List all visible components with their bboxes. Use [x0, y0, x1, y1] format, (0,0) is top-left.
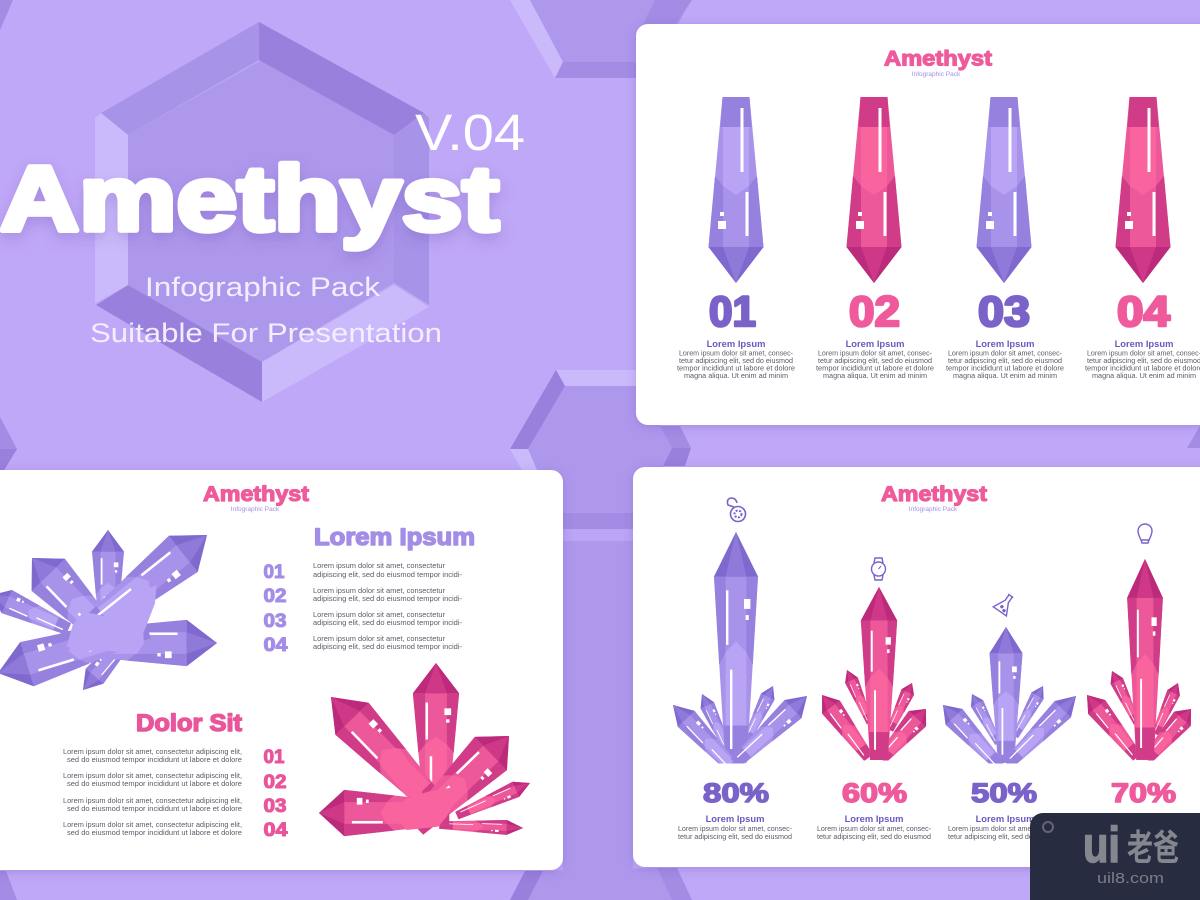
list numbers: pink — [264, 746, 288, 841]
list text: purple: adipiscing elit, sed do eiusmod tempor incidi- — [313, 594, 463, 603]
list numbers: purple: 03 — [264, 610, 287, 632]
panel heading: Infographic Pack — [909, 506, 958, 513]
panel heading: Amethyst — [884, 48, 992, 70]
list numbers: pink: 02 — [264, 771, 287, 793]
watermark badge: uil8.com — [1097, 870, 1164, 887]
icon: padlock — [727, 498, 746, 522]
step numbers: 02 — [849, 288, 900, 336]
crystal chart: 70% — [1087, 559, 1191, 760]
step 01 text: magna aliqua. Ut enim ad minim — [684, 371, 788, 380]
subtitle: Suitable For Presentation — [90, 318, 442, 348]
list numbers: purple: 02 — [264, 585, 287, 607]
list text: pink: sed do eiusmod tempor incididunt ut labore et dolore — [67, 828, 242, 837]
subtitle: Infographic Pack — [145, 272, 381, 302]
step 04 text: tempor incididunt ut labore et dolore — [1085, 364, 1200, 372]
list text: purple: adipiscing elit, sed do eiusmod tempor incidi- — [313, 570, 463, 579]
step numbers: 01 — [709, 288, 756, 336]
list text: pink: Lorem ipsum dolor sit amet, consectetur adipiscing elit, — [63, 747, 242, 756]
step 02 text: tetur adipiscing elit, sed do eiusmod — [818, 356, 932, 365]
icon: wristwatch — [872, 558, 886, 580]
list text: purple: Lorem ipsum dolor sit amet, consectetur — [313, 561, 446, 570]
watermark badge — [1030, 813, 1200, 900]
background hexagon: centre — [510, 370, 691, 886]
step 01 text: Lorem Ipsum — [707, 338, 765, 349]
crystal 04 — [1116, 97, 1170, 283]
percentages: 50% — [971, 778, 1037, 808]
list text: pink: sed do eiusmod tempor incididunt ut labore et dolore — [67, 804, 242, 813]
step 04 text: Lorem Ipsum — [1115, 338, 1173, 349]
list numbers: pink: 01 — [264, 746, 285, 768]
percentage captions — [678, 813, 1063, 841]
step 02 text: Lorem Ipsum — [846, 338, 904, 349]
panel heading: Infographic Pack — [912, 71, 961, 78]
main title: Amethyst — [0, 148, 499, 250]
percentages: 60% — [842, 778, 907, 808]
crystal 01 — [708, 97, 764, 283]
large hexagon behind title — [95, 22, 429, 402]
percentage captions: Lorem ipsum dolor sit amet, consec- — [817, 824, 932, 833]
percentage captions: Lorem Ipsum — [845, 813, 903, 824]
list numbers: pink: 04 — [264, 819, 288, 841]
crystal chart: 60% — [822, 587, 926, 760]
step 01 text: tempor incididunt ut labore et dolore — [677, 364, 795, 372]
list text: pink: Lorem ipsum dolor sit amet, consectetur adipiscing elit, — [63, 771, 242, 780]
panel heading: Amethyst — [203, 483, 309, 506]
panel heading — [881, 483, 987, 513]
step 02 text: magna aliqua. Ut enim ad minim — [823, 371, 927, 380]
list numbers: purple: 04 — [264, 634, 288, 656]
percentage captions: Lorem Ipsum — [976, 813, 1034, 824]
step numbers: 04 — [1117, 288, 1170, 336]
step 02 text — [816, 338, 934, 380]
crystal 02 — [846, 97, 902, 283]
percentages: 80% — [703, 778, 769, 808]
list text: pink: Lorem ipsum dolor sit amet, consectetur adipiscing elit, — [63, 820, 242, 829]
percentages — [703, 778, 1176, 808]
purple crystal cluster — [0, 517, 221, 697]
panel: four crystal steps — [636, 24, 1200, 425]
list numbers: purple: 01 — [264, 561, 285, 583]
list text: purple: adipiscing elit, sed do eiusmod tempor incidi- — [313, 642, 463, 651]
icon: light bulb — [1138, 524, 1152, 543]
percentage captions: Lorem ipsum dolor sit amet, consec- — [948, 824, 1063, 833]
subtitle — [90, 272, 442, 348]
panel heading: Infographic Pack — [231, 506, 280, 513]
percentage captions: tetur adipiscing elit, sed do eiusmod — [817, 832, 931, 841]
list numbers: pink: 03 — [264, 795, 287, 817]
list text: pink — [63, 747, 242, 837]
step 03 text — [946, 338, 1064, 380]
crystal 03 — [976, 97, 1032, 283]
list text: purple: Lorem ipsum dolor sit amet, consectetur — [313, 610, 446, 619]
panel heading — [884, 48, 992, 78]
panel heading: Amethyst — [881, 483, 987, 506]
step 04 text: magna aliqua. Ut enim ad minim — [1092, 371, 1196, 380]
list text: purple — [313, 561, 463, 651]
panel: percentage crystals — [633, 467, 1200, 867]
step 01 text: tetur adipiscing elit, sed do eiusmod — [679, 356, 793, 365]
percentage captions: tetur adipiscing elit, sed do eiusmod — [678, 832, 792, 841]
list heading: Lorem Ipsum: Lorem Ipsum — [314, 524, 475, 551]
list text: pink: sed do eiusmod tempor incididunt ut labore et dolore — [67, 755, 242, 764]
pink crystal cluster — [314, 663, 533, 843]
crystal chart: 80% — [673, 532, 807, 764]
step 01 text — [677, 338, 795, 380]
list text: pink: sed do eiusmod tempor incididunt ut labore et dolore — [67, 779, 242, 788]
step 03 text: magna aliqua. Ut enim ad minim — [953, 371, 1057, 380]
panel heading — [203, 483, 309, 513]
list text: purple: Lorem ipsum dolor sit amet, consectetur — [313, 634, 446, 643]
watermark badge: ui — [1083, 817, 1120, 873]
panel: crystal clusters with lists — [0, 470, 563, 870]
version label: V.04 — [415, 104, 525, 161]
list text: purple: Lorem ipsum dolor sit amet, consectetur — [313, 586, 446, 595]
step 02 text: Lorem ipsum dolor sit amet, consec- — [818, 348, 933, 358]
step 03 text: Lorem ipsum dolor sit amet, consec- — [948, 348, 1063, 358]
step 04 text — [1085, 338, 1200, 380]
step 03 text: Lorem Ipsum — [976, 338, 1034, 349]
step 02 text: tempor incididunt ut labore et dolore — [816, 364, 934, 372]
list numbers: purple — [264, 561, 288, 656]
step 03 text: tetur adipiscing elit, sed do eiusmod — [948, 356, 1062, 365]
percentage captions: Lorem ipsum dolor sit amet, consec- — [678, 824, 793, 833]
list text: purple: adipiscing elit, sed do eiusmod tempor incidi- — [313, 618, 463, 627]
list text: pink: Lorem ipsum dolor sit amet, consectetur adipiscing elit, — [63, 796, 242, 805]
step 01 text: Lorem ipsum dolor sit amet, consec- — [679, 348, 794, 358]
percentage captions: Lorem Ipsum — [706, 813, 764, 824]
watermark badge: 老爸 — [1127, 827, 1179, 868]
list heading: Dolor Sit: Dolor Sit — [136, 710, 242, 737]
icon: flask — [993, 591, 1017, 616]
background hexagon: top — [510, 0, 692, 78]
step numbers — [709, 288, 1170, 336]
percentages: 70% — [1111, 778, 1176, 808]
step numbers: 03 — [978, 288, 1030, 336]
crystal chart: 50% — [943, 627, 1076, 764]
percentage captions: tetur adipiscing elit, sed do eiusmod — [948, 832, 1062, 841]
step 03 text: tempor incididunt ut labore et dolore — [946, 364, 1064, 372]
background hexagon: bottom — [510, 868, 692, 900]
